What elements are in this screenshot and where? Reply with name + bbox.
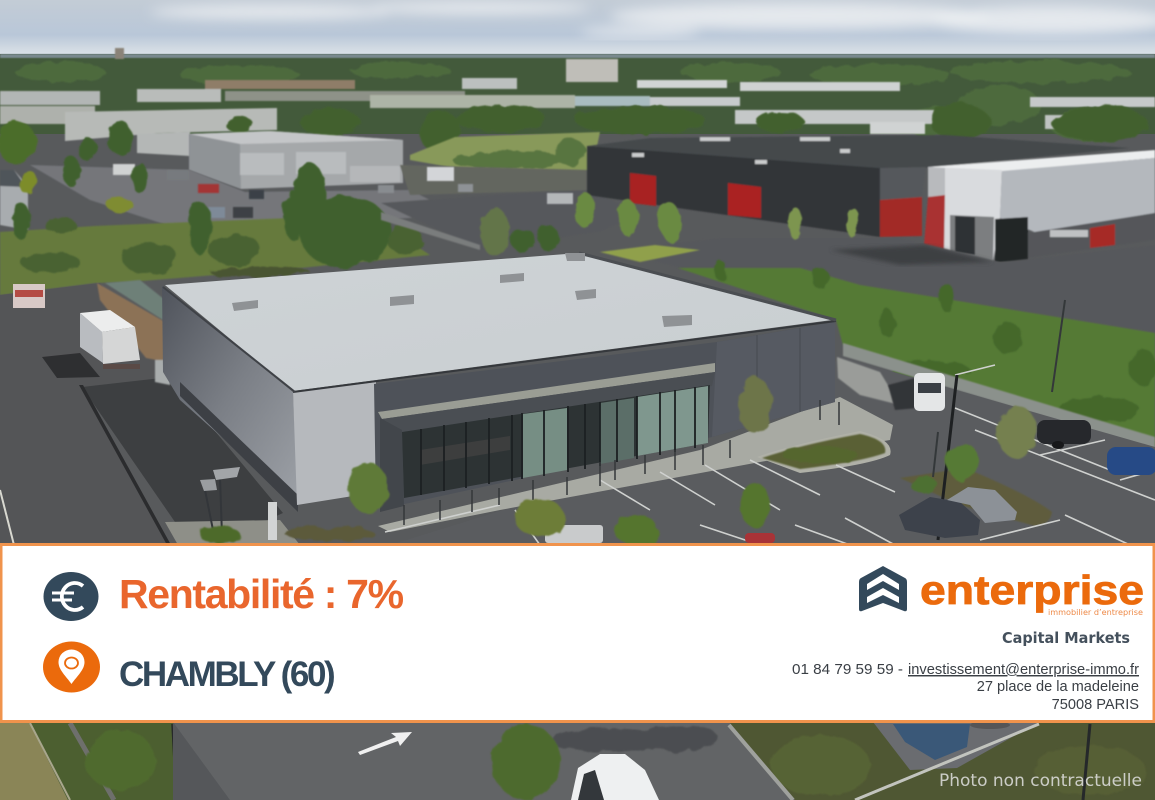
far warehouse [587, 135, 1155, 262]
text: contact details [792, 662, 1139, 713]
disclaimer: Photo non contractuelle [939, 771, 1142, 790]
icon: chevrons [859, 566, 907, 611]
roof vents [232, 253, 692, 327]
right lawn [678, 260, 1155, 447]
text: contact details: investissement@enterprise-immo.fr [908, 662, 1139, 678]
delivery truck [13, 284, 140, 378]
left service yard [0, 283, 170, 545]
distant treeline [0, 54, 1155, 142]
text: contact details: 75008 PARIS [1052, 697, 1139, 713]
planted island by cars [900, 468, 1052, 526]
front pale facade [293, 382, 378, 505]
logo: enterprise: enterprise [920, 567, 1144, 613]
right road [610, 238, 1155, 333]
parked cars far [113, 164, 573, 218]
heading: yield: Rentabilité : 7% [119, 571, 404, 617]
front dark facade [374, 322, 835, 505]
roof [165, 253, 832, 391]
trees behind near buildings [226, 104, 1148, 166]
heading: location: CHAMBLY (60) [119, 655, 334, 694]
text: contact details: 01 84 79 59 59 - [792, 662, 903, 678]
logo: enterprise [859, 566, 1144, 617]
planted island near entrance [757, 431, 891, 473]
lamp posts [200, 300, 1065, 540]
fence middle [381, 212, 480, 250]
text: contact details: 27 place de la madeleine [977, 679, 1139, 695]
icon: location pin [43, 642, 100, 692]
canopy [378, 363, 715, 419]
left car park [30, 165, 640, 250]
distant buildings [0, 48, 1155, 156]
sidewalk [378, 397, 893, 532]
grey warehouses [0, 131, 403, 230]
cars and van [545, 373, 1155, 543]
glazing [402, 385, 710, 498]
info panel [1, 544, 1154, 722]
logo: enterprise: immobilier d’entreprise [1048, 608, 1143, 617]
foreground car park [390, 356, 1155, 545]
lower photo strip [0, 721, 1155, 800]
left facade [162, 286, 298, 505]
icon: euro [44, 572, 98, 621]
bollards [404, 400, 839, 525]
fence along lawn [843, 343, 1155, 449]
grass and shrubs, middle ground [410, 132, 600, 180]
parking markings [385, 365, 1155, 545]
main building [162, 253, 839, 525]
sky [0, 0, 1155, 58]
middle foliage [0, 121, 860, 295]
pallets and covered area [97, 280, 170, 385]
foreground trees and shrubs [200, 377, 1037, 545]
text: Capital Markets: Capital Markets [1002, 629, 1130, 647]
